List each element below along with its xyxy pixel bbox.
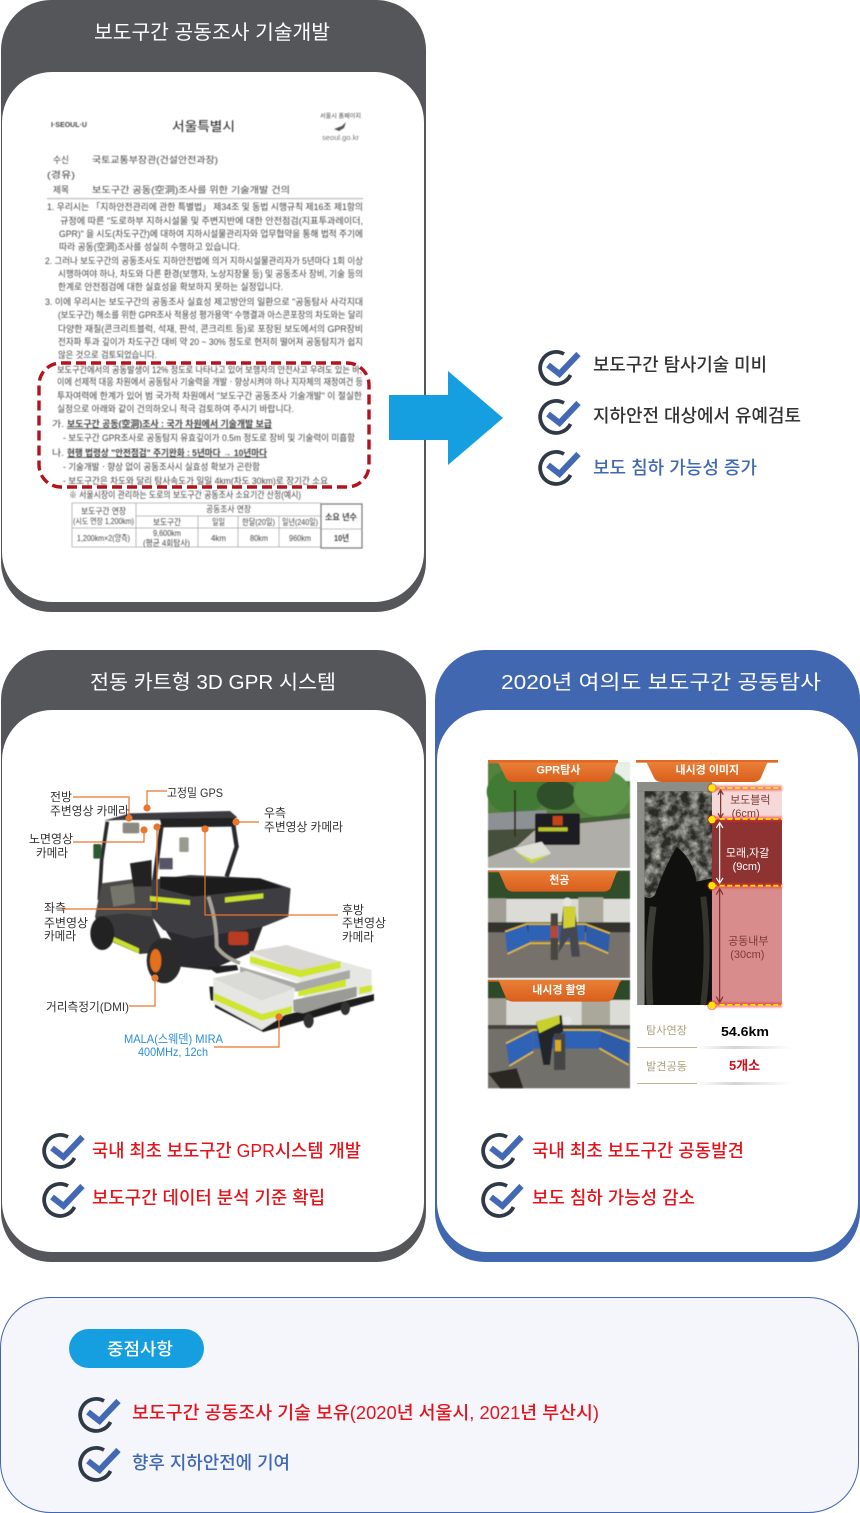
heading: panel 2 title: 전동 카트형 3D GPR 시스템: [90, 671, 336, 694]
banner: 내시경 촬영: [488, 980, 621, 1002]
layer: sidewalk block: (6cm): [732, 808, 760, 820]
badge: 중점사항: [69, 1329, 204, 1368]
arrow: blue right arrow: [389, 371, 503, 465]
document: Seoul city official letter: 다양한 재질(콘크리트블럭, 석재, 판석, 콘크리트 등)로 포장된 보도에서의 GPR장비: [58, 323, 363, 334]
document: Seoul city official letter: 1. 우리시는 「지하안전관리에 관한 특별법」 제34조 및 동법 시행규칙 제16조 제1항의: [47, 201, 363, 212]
document: Seoul city official letter: 규정에 따른 "도로하부 지하시설물 및 주변지반에 대한 안전점검(지표투과레이더,: [60, 215, 363, 226]
text: technology ownership: 보도구간 공동조사 기술 보유(2020년 서울시, 2021년 부산시): [132, 1403, 599, 1423]
document: Seoul city official letter: - 기술개발ㆍ향상 없이 공동조사시 실효성 확보가 곤란함: [63, 461, 260, 472]
labels: cart component callouts: 우측: [264, 806, 286, 820]
table: survey period estimate: 보도구간 연장: [81, 506, 126, 516]
icon: check: [80, 1399, 118, 1431]
table: survey period estimate: 한달(20일): [242, 517, 275, 527]
document: Seoul city official letter: 제목: [53, 185, 69, 195]
table: survey period estimate: 80km: [250, 533, 268, 543]
photo: GPR survey: [487, 763, 630, 868]
layer: sidewalk block: [712, 788, 782, 820]
layer: cavity interior: 공동내부: [728, 934, 769, 947]
table: survey period estimate: 9,600km: [153, 528, 181, 538]
document: Seoul city official letter: (보도구간) 해소를 위한 GPR조사 적용성 평가용역" 수행결과 아스콘포장의 차도와는 달리: [58, 309, 363, 320]
document: Seoul city official letter: 않은 것으로 검토되었습니다.: [58, 349, 157, 360]
table: survey period estimate: (시도 연장 1,200km): [73, 516, 134, 526]
table: survey results: 54.6km: [721, 1024, 769, 1039]
document: Seoul city official letter: 나.: [52, 448, 64, 458]
document: Seoul city official letter: - 보도구간은 차도와 달리 탐사속도가 일일 4km(차도 30km)로 장기간 소요: [63, 475, 328, 486]
table: survey period estimate: 960km: [289, 533, 311, 543]
icon: check: [44, 1135, 82, 1167]
labels: cart component callouts: 주변영상: [44, 916, 88, 930]
table: survey period estimate: 10년: [334, 533, 349, 543]
document: Seoul city official letter: 시행하여야 하나, 차도와 다른 환경(보행자, 노상지장물 등) 및 공동조사 장비, 기술 등의: [58, 268, 363, 279]
text: underground safety contribution: 향후 지하안전에 기여: [132, 1453, 290, 1473]
labels: cart component callouts: 전방: [50, 790, 72, 804]
table: survey period estimate: 4km: [211, 533, 226, 543]
table: survey results: 발견공동: [646, 1060, 687, 1073]
labels: cart component callouts: 후방: [342, 903, 364, 917]
document: Seoul city official letter: [45, 112, 363, 548]
labels: cart component callouts: 주변영상 카메라: [264, 820, 343, 834]
document: Seoul city official letter: 실정으로 아래와 같이 건의하오니 적극 검토하여 주시기 바랍니다.: [57, 403, 294, 414]
document: Seoul city official letter: - 보도구간 GPR조사로 공동탐지 유효깊이가 0.5m 정도로 장비 및 기술력이 미흡함: [63, 432, 355, 443]
labels: cart component callouts: 카메라: [36, 846, 68, 860]
icon: check: [483, 1135, 522, 1167]
text: first cavity discovery: 국내 최초 보도구간 공동발견: [532, 1141, 744, 1161]
callout: red dashed highlight: [39, 363, 369, 487]
markers: layer boundaries: [707, 783, 782, 1010]
text: item 1: 보도구간 탐사기술 미비: [593, 355, 767, 375]
banner: 내시경 이미지: [636, 760, 778, 782]
table: survey period estimate: 공동조사 연장: [206, 504, 251, 514]
labels: cart component callouts: 좌측: [44, 901, 66, 915]
labels: cart component callouts: 고정밀 GPS: [167, 786, 223, 800]
photo: drilling: [488, 871, 630, 978]
document: Seoul city official letter: I·SEOUL·U: [51, 120, 87, 129]
table: survey period estimate: 일년(240일): [282, 517, 318, 527]
panel: 2020 Yeouido sidewalk survey: [435, 650, 860, 1262]
document: Seoul city official letter: 보도구간 공동(空洞)조사를 위한 기술개발 건의: [92, 185, 290, 195]
document: Seoul city official letter: 서울특별시: [172, 119, 235, 134]
photo: endoscope shooting: [488, 980, 630, 1088]
labels: cart component callouts: 주변영상 카메라: [50, 804, 129, 818]
document: Seoul city official letter: 보도구간에서의 공동발생이 12% 정도로 나타나고 있어 보행자의 안전사고 우려도 있는 바,: [57, 364, 362, 375]
document: Seoul city official letter: 가.: [52, 419, 64, 429]
text: data analysis criteria: 보도구간 데이터 분석 기준 확립: [92, 1188, 325, 1208]
heading: panel 3 title: 2020년 여의도 보도구간 공동탐사: [501, 671, 821, 694]
banner: 천공: [488, 871, 618, 892]
illustration: GPR cart: [90, 811, 374, 1032]
layer: sand and gravel: [712, 819, 782, 886]
table: survey results: [637, 1024, 792, 1085]
text: subsidence reduction: 보도 침하 가능성 감소: [532, 1188, 695, 1208]
panel: technical development request: [1, 0, 426, 612]
document: Seoul city official letter: 전자파 투과 깊이가 차도구간 대비 약 20 ~ 30% 정도로 현저히 떨어져 공동탐지가 쉽지: [58, 336, 363, 347]
text: GPR system achievement: 국내 최초 보도구간 GPR시스템 개발: [92, 1141, 361, 1161]
icon: check: [80, 1448, 118, 1480]
photos: survey process: [487, 760, 630, 1088]
panel: electric cart 3D GPR system: [1, 650, 426, 1262]
text: item 3: 보도 침하 가능성 증가: [593, 458, 757, 478]
document: Seoul city official letter: 2. 그러나 보도구간의 공동조사도 지하안전법에 의거 지하시설물관리자가 5년마다 1회 이상: [45, 256, 363, 266]
document: Seoul city official letter: 한계로 안전점검에 대한 실효성을 확보하지 못하는 실정입니다.: [58, 281, 283, 292]
list: panel 1 conclusions: [540, 352, 801, 484]
photo: cavity endoscope: [637, 782, 712, 1005]
layer: cavity interior: (30cm): [730, 949, 764, 961]
labels: cart component callouts: 카메라: [342, 930, 374, 944]
layer: sand and gravel: (9cm): [733, 861, 761, 873]
icon: check: [483, 1184, 522, 1216]
document: Seoul city official letter: 서울시 홈페이지: [320, 112, 361, 120]
document: Seoul city official letter: 투자여력에 한계가 있어 범 국가적 차원에서 "보도구간 공동조사 기술개발" 이 절실한: [57, 390, 362, 401]
document: Seoul city official letter: GPR)" 을 시도(차도구간)에 대하여 지하시설물관리자와 업무협약을 통해 법적 주기에: [59, 228, 363, 239]
document: Seoul city official letter: (경유): [47, 169, 75, 180]
layer: sand and gravel: 모래,자갈: [726, 846, 769, 860]
table: survey period estimate: [72, 503, 362, 548]
labels: cart component callouts: 카메라: [44, 929, 76, 943]
document: Seoul city official letter: 국토교통부장관(건설안전과장): [92, 155, 218, 165]
icon: check: [540, 352, 578, 384]
banner: GPR탐사: [488, 760, 618, 782]
icon: check: [44, 1184, 82, 1216]
labels: cart component callouts: 거리측정기(DMI): [46, 1000, 129, 1014]
labels: cart component callouts: [29, 786, 386, 1059]
document: Seoul city official letter: ※ 서울시장이 관리하는 도로의 보도구간 공동조사 소요기간 산정(예시): [69, 490, 301, 500]
table: survey period estimate: 보도구간: [153, 517, 181, 527]
banner: 천공: 천공: [549, 872, 569, 886]
banner: GPR탐사: GPR탐사: [536, 764, 580, 777]
document: Seoul city official letter: 이에 선제적 대응 차원에서 공동탐사 기술력을 개발ㆍ향상시켜야 하나 지자체의 재정여건 등: [57, 376, 363, 387]
panel: key points: [0, 1298, 858, 1512]
table: survey period estimate: 1,200km×2(양측): [77, 533, 130, 543]
table: survey period estimate: 소요 년수: [325, 512, 357, 522]
table: survey period estimate: (평균 4회탐사): [143, 538, 190, 548]
layer: sidewalk block: 보도블럭: [730, 793, 771, 806]
layer: cavity interior: [712, 886, 782, 1005]
table: survey period estimate: 일일: [212, 517, 225, 527]
chart: endoscope layer image: [636, 760, 782, 1010]
document: Seoul city official letter: 3. 이에 우리시는 보도구간의 공동조사 실효성 제고방안의 일환으로 "공동탐사 사각지대: [45, 296, 363, 307]
labels: cart component callouts: 400MHz, 12ch: [138, 1045, 208, 1059]
icon: check: [540, 452, 578, 484]
banner: 내시경 촬영: 내시경 촬영: [532, 982, 586, 996]
labels: cart component callouts: MALA(스웨덴) MIRA: [124, 1032, 223, 1046]
banner: 내시경 이미지: 내시경 이미지: [675, 763, 739, 777]
heading: panel 1 title: 보도구간 공동조사 기술개발: [94, 21, 330, 44]
document: Seoul city official letter: seoul.go.kr: [322, 135, 360, 142]
icon: check: [540, 401, 578, 433]
table: survey results: 5개소: [729, 1058, 760, 1073]
labels: cart component callouts: 노면영상: [29, 832, 73, 846]
document: Seoul city official letter: 따라 공동(空洞)조사를 성실히 수행하고 있습니다.: [59, 241, 240, 252]
document: Seoul city official letter: 보도구간 공동(空洞)조사 : 국가 차원에서 기술개발 보급: [67, 418, 272, 429]
document: Seoul city official letter: 수신: [53, 155, 69, 165]
labels: cart component callouts: 주변영상: [342, 916, 386, 930]
text: item 2: 지하안전 대상에서 유예검토: [593, 406, 801, 426]
document: Seoul city official letter: 현행 법령상 "안전점검" 주기완화 : 5년마다 → 10년마다: [67, 447, 268, 458]
badge: 중점사항: 중점사항: [107, 1340, 173, 1359]
table: survey results: 탐사연장: [646, 1024, 687, 1037]
